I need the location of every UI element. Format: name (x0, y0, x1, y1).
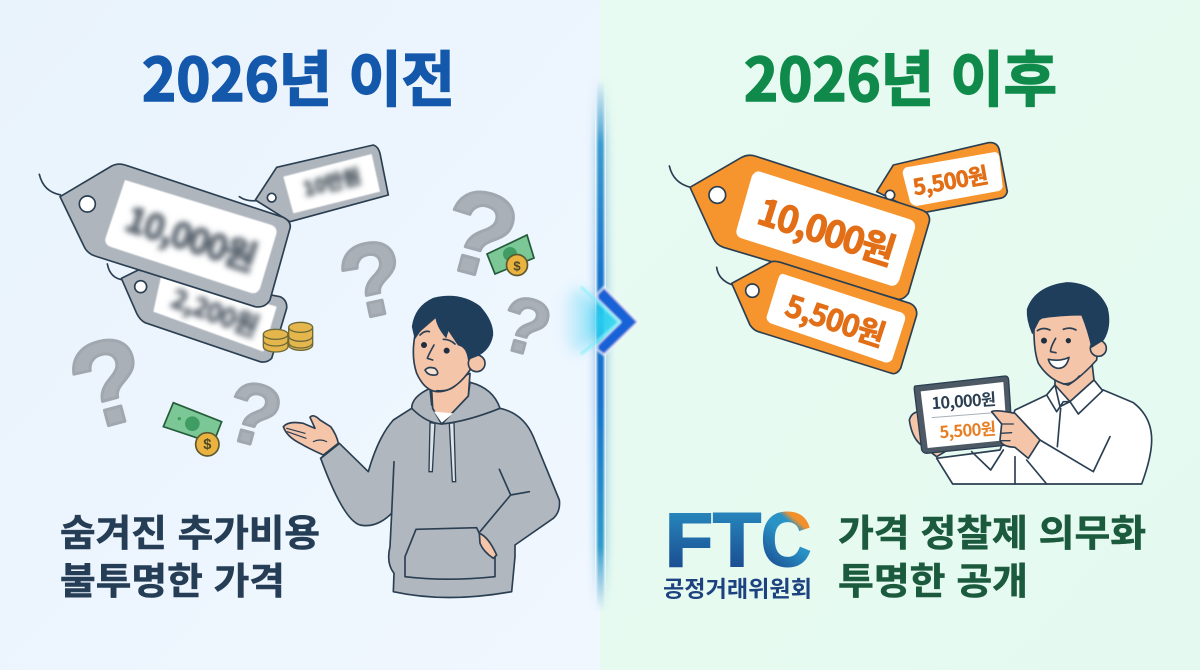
text block: before caption (60, 503, 320, 605)
panel: before background (0, 0, 600, 670)
pocket (405, 528, 495, 579)
drawstrings (429, 423, 456, 482)
tag: large blurred tag (39, 164, 290, 307)
shirt (937, 385, 1152, 484)
collar (1047, 380, 1103, 414)
text block: after caption: 투명한 공개 (838, 551, 1028, 605)
central divider with chevron arrow (560, 80, 638, 610)
tucked hand (479, 533, 497, 558)
tag: small orange tag (877, 143, 1007, 213)
tablet (914, 376, 1013, 453)
logo: FTC: FT (665, 498, 761, 583)
tablet: 5,500원 (939, 415, 996, 443)
tag: small blurred tag (239, 145, 388, 222)
icon: question mark middle: ? (329, 217, 416, 344)
icon: question mark right: ? (491, 277, 560, 375)
panel: after background (600, 0, 1200, 670)
icon: question mark large left: ? (56, 309, 161, 457)
tag: large blurred tag: 10,000원 (120, 192, 263, 280)
icon: banknote with dollar coin (163, 403, 222, 456)
neck (1055, 360, 1094, 402)
illustration: confused man in hoodie (283, 296, 560, 597)
head (1027, 283, 1109, 385)
text block: before caption: 숨겨진 추가비용 (60, 503, 320, 557)
icon: banknote top right: $ (513, 258, 521, 274)
shirt seams (972, 408, 1110, 484)
left hand behind tablet (909, 412, 945, 457)
icon: question mark small bottom: ? (216, 362, 291, 468)
tag: small blurred tag: 10만원 (300, 161, 363, 202)
raised open hand (283, 416, 338, 455)
logo: FTC: C (761, 498, 811, 583)
neck and shirt (412, 373, 500, 424)
head (412, 296, 493, 392)
text block: after caption (838, 503, 1146, 605)
tag: lower orange tag: 5,500원 (780, 282, 891, 355)
illustration: smiling man with tablet (909, 283, 1152, 484)
icon group: orange price tags (669, 143, 1007, 374)
tag: lower blurred tag: 2,200원 (167, 279, 263, 344)
tag: large orange tag: 10,000원 (752, 182, 901, 275)
text block: before caption: 불투명한 가격 (60, 551, 285, 605)
logo: FTC (663, 498, 812, 604)
text block: after caption: 가격 정찰제 의무화 (838, 503, 1146, 557)
heading: 2026년 이후: 2026년 이후 (744, 32, 1057, 119)
heading: 2026년 이전: 2026년 이전 (142, 32, 455, 119)
icon: banknote with dollar coin: $ (203, 437, 211, 453)
tag: lower orange tag (717, 261, 917, 374)
tag: small orange tag: 5,500원 (910, 158, 990, 202)
tablet: 10,000원 (931, 386, 996, 414)
icon: question mark top: ? (427, 161, 531, 307)
tag: lower blurred tag (107, 264, 287, 362)
icon: banknote top right (487, 235, 534, 276)
hoodie body (321, 382, 560, 597)
logo: FTC: 공정거래위원회 (663, 572, 812, 604)
icon: coin stacks (263, 322, 313, 352)
icon group: blurred grey price tags (39, 145, 388, 456)
tag: large orange tag (669, 155, 930, 299)
pointing hand and cuff (992, 411, 1040, 458)
hoodie seams (321, 443, 529, 532)
